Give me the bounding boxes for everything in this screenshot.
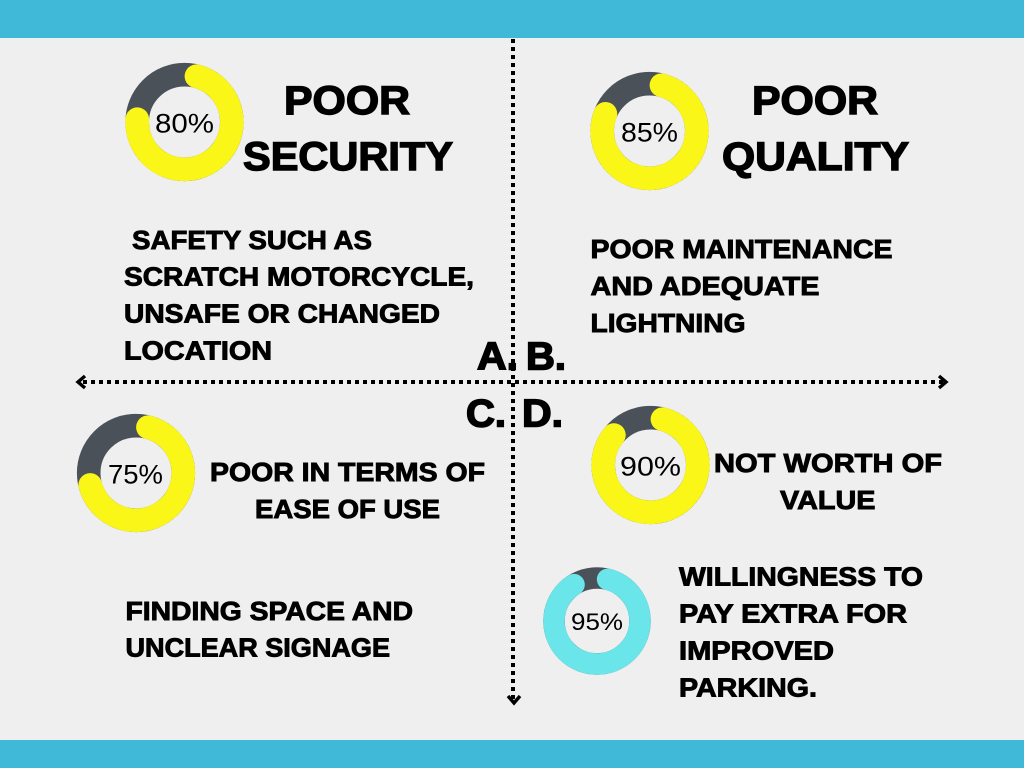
text: not worth of value: VALUE	[780, 485, 876, 515]
heading: poor quality: QUALITY	[722, 135, 909, 179]
heading: ease of use	[210, 457, 485, 524]
vertical dotted axis with arrow	[508, 39, 520, 703]
donut: 85%	[592, 73, 707, 189]
text: safety description: SCRATCH MOTORCYCLE,	[124, 262, 474, 292]
text: finding space	[126, 596, 413, 662]
text: finding space: FINDING SPACE AND	[126, 596, 413, 626]
text: willingness to pay: IMPROVED	[679, 636, 834, 666]
text: maintenance description: AND ADEQUATE	[590, 271, 820, 301]
panel: poor security	[124, 64, 474, 365]
panel: value and willingness to pay	[545, 407, 942, 702]
text: safety description: UNSAFE OR CHANGED	[124, 298, 440, 328]
top banner	[0, 0, 1024, 38]
donut: 75%	[78, 415, 194, 531]
quadrant letters: B.	[526, 336, 566, 378]
heading: poor security	[243, 79, 453, 179]
text: maintenance description	[590, 234, 892, 338]
text: willingness to pay: WILLINGNESS TO	[679, 562, 923, 592]
text: safety description: SAFETY SUCH AS	[132, 225, 372, 255]
quadrant letters: A.	[477, 336, 518, 378]
quadrant letters: C.	[466, 392, 506, 436]
text: safety description: LOCATION	[124, 336, 272, 366]
text: willingness to pay	[679, 562, 923, 702]
text: maintenance description: POOR MAINTENANCE	[590, 234, 892, 264]
heading: poor quality: POOR	[752, 79, 878, 123]
donut: 80%	[127, 64, 242, 180]
text: willingness to pay: PAY EXTRA FOR	[679, 598, 907, 628]
donut: 85%: 85%	[621, 118, 678, 148]
text: not worth of value: NOT WORTH OF	[714, 448, 942, 478]
heading: ease of use: POOR IN TERMS OF	[210, 457, 485, 487]
donut: 95%: 95%	[571, 609, 623, 636]
donut: 90%	[593, 407, 708, 523]
panel: ease of use	[78, 415, 485, 662]
donut: 95%	[545, 569, 649, 673]
horizontal dotted axis with arrows	[78, 376, 946, 388]
heading: poor security: POOR	[284, 79, 410, 123]
heading: poor quality	[722, 79, 909, 179]
text: not worth of value	[714, 448, 942, 515]
heading: ease of use: EASE OF USE	[255, 494, 440, 524]
donut: 75%: 75%	[108, 460, 163, 490]
heading: poor security: SECURITY	[243, 135, 453, 179]
text: maintenance description: LIGHTNING	[590, 308, 746, 338]
text: finding space: UNCLEAR SIGNAGE	[126, 632, 390, 662]
donut: 90%: 90%	[620, 452, 681, 482]
text: willingness to pay: PARKING.	[679, 672, 817, 702]
bottom banner	[0, 740, 1024, 768]
panel: poor quality	[590, 73, 909, 338]
text: safety description	[124, 225, 474, 366]
quadrant letters: D.	[522, 392, 563, 436]
quadrant letters	[466, 336, 566, 436]
donut: 80%: 80%	[155, 108, 214, 138]
